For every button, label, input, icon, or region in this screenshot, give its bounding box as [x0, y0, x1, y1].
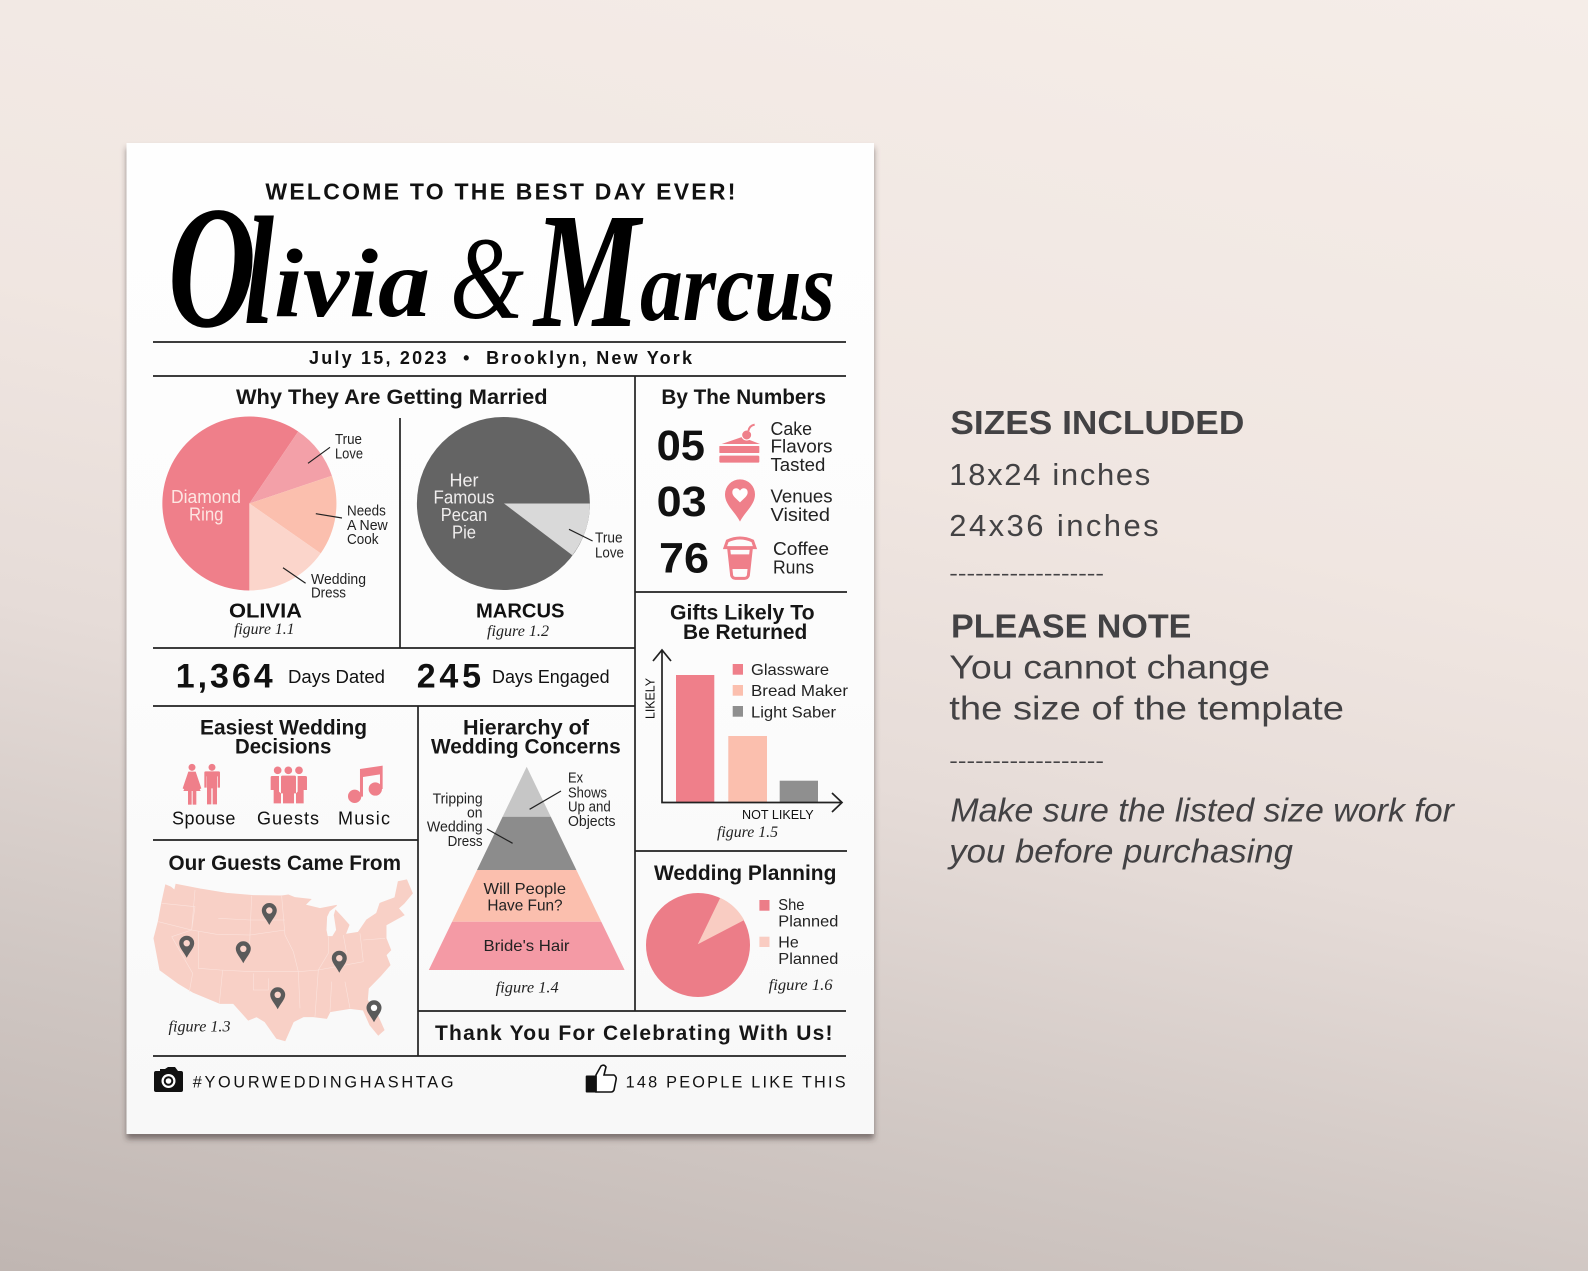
- stat: venues: Venues: [770, 486, 832, 507]
- icon labels: Spouse: [172, 808, 235, 828]
- pie chart: planning split: [646, 893, 750, 997]
- stat: venues: [657, 478, 832, 526]
- legend: Light Saber: [751, 704, 837, 721]
- pie chart: Olivia: Love: [335, 445, 363, 462]
- icon: camera: [154, 1067, 183, 1092]
- legend: Planned: [778, 951, 838, 968]
- stat: cake flavors: Tasted: [770, 454, 825, 475]
- pie chart: Marcus: Pie: [452, 522, 476, 542]
- icon: guests group: [271, 766, 307, 803]
- date and place: July 15, 2023 • Brooklyn, New York: [309, 348, 693, 368]
- panel: gifts likely to be returned: [642, 601, 849, 841]
- heading: Easiest Wedding: [200, 716, 367, 739]
- icon: music note: [348, 766, 383, 803]
- pyramid chart: Ex: [568, 770, 583, 787]
- stat strip: days dated and engaged: Days Engaged: [492, 667, 610, 687]
- pyramid chart: Shows: [568, 784, 607, 801]
- stat: coffee: Runs: [773, 557, 814, 578]
- pyramid chart: on: [467, 805, 482, 822]
- pyramid chart: Wedding: [427, 819, 483, 836]
- pie chart: Olivia: Dress: [311, 584, 346, 601]
- pie chart: Marcus: [417, 417, 624, 590]
- stat: cake flavors: Flavors: [770, 436, 832, 457]
- pyramid chart: Dress: [448, 833, 483, 850]
- pie chart: Marcus: Her: [450, 471, 478, 491]
- caption: figure 1.4: figure 1.4: [496, 980, 559, 997]
- grid rules: [153, 342, 847, 1056]
- stat: venues: 03: [657, 478, 707, 526]
- legend: [759, 897, 838, 968]
- size option: 24x36 inches: [949, 508, 1159, 543]
- side notes: [947, 404, 1456, 869]
- icon: spouse couple: [183, 764, 220, 805]
- pyramid chart: Tripping: [433, 790, 483, 807]
- panel: hierarchy of wedding concerns: [427, 716, 625, 997]
- panel: our guests came from: [154, 852, 412, 1041]
- thank you banner: Thank You For Celebrating With Us!: [435, 1022, 832, 1045]
- couple names script title: O: [168, 170, 256, 364]
- stat strip: days dated and engaged: Days Dated: [288, 667, 385, 687]
- icon labels: Guests: [257, 808, 319, 828]
- heading: Our Guests Came From: [168, 852, 401, 875]
- legend: [733, 662, 849, 721]
- stat: coffee: [659, 534, 829, 582]
- pie chart: Marcus: Famous: [434, 487, 494, 507]
- heading: Why They Are Getting Married: [236, 386, 548, 409]
- pyramid chart: Will People: [484, 881, 566, 898]
- panel: why they are getting married: [162, 386, 624, 640]
- map pins: [179, 903, 382, 1022]
- stat strip: days dated and engaged: [176, 657, 610, 695]
- heading: sizes included: SIZES INCLUDED: [950, 404, 1244, 441]
- stat: cake flavors: [657, 418, 832, 475]
- pie chart: Marcus: Pecan: [441, 505, 487, 525]
- panel: wedding planning: [646, 862, 838, 997]
- legend: He: [778, 934, 799, 951]
- couple names script title: arcus: [640, 231, 835, 342]
- hashtag: #YOURWEDDINGHASHTAG: [193, 1074, 453, 1092]
- legend: Planned: [778, 914, 838, 931]
- like count: 148 PEOPLE LIKE THIS: [626, 1074, 846, 1092]
- pie chart: Olivia: Cook: [347, 531, 379, 548]
- stat strip: days dated and engaged: 245: [417, 657, 481, 695]
- italic note: you before purchasing: [947, 832, 1294, 869]
- icon: thumbs up: [586, 1065, 616, 1092]
- pie chart: Olivia: Needs: [347, 503, 386, 520]
- dashed separator: ------------------: [949, 751, 1104, 773]
- pie chart: Olivia: True: [335, 431, 362, 448]
- label: Olivia: OLIVIA: [229, 599, 302, 622]
- bar chart: [642, 650, 842, 822]
- caption: figure 1.5: figure 1.5: [717, 824, 778, 841]
- pyramid chart: Have Fun?: [487, 898, 563, 915]
- pyramid chart: Up and: [568, 799, 611, 816]
- poster footer: [154, 1065, 846, 1092]
- stat: coffee: Coffee: [773, 538, 829, 559]
- dashed separator: ------------------: [949, 563, 1104, 585]
- couple names script title: ivia: [274, 230, 430, 338]
- heading: Hierarchy of: [463, 716, 590, 739]
- panel: hierarchy of wedding concerns: Wedding Concerns: [431, 735, 621, 758]
- caption: figure 1.1: figure 1.1: [234, 621, 294, 638]
- couple names script title: M: [532, 179, 644, 362]
- note text: the size of the template: [949, 689, 1344, 726]
- bar chart: NOT LIKELY: [742, 807, 814, 822]
- panel: easiest wedding decisions: [172, 716, 390, 828]
- label: Marcus: MARCUS: [476, 599, 564, 622]
- stat: venues: Visited: [770, 504, 830, 525]
- stat: cake flavors: Cake: [770, 418, 812, 439]
- welcome line: WELCOME TO THE BEST DAY EVER!: [265, 178, 735, 204]
- stat: cake flavors: 05: [657, 422, 705, 470]
- heading: By The Numbers: [661, 386, 826, 409]
- pie chart: Olivia: A New: [347, 517, 388, 534]
- stat: coffee: 76: [659, 534, 709, 582]
- pie chart: Olivia: Ring: [189, 505, 224, 525]
- panel: by the numbers: [657, 386, 832, 582]
- pyramid chart: [427, 767, 625, 970]
- couple names script title: &: [450, 213, 524, 344]
- size option: 18x24 inches: [949, 457, 1150, 492]
- pie chart: Olivia: Diamond: [171, 487, 241, 507]
- poster sheet: [126, 143, 874, 1134]
- bar chart: LIKELY: [642, 678, 658, 719]
- italic note: Make sure the listed size work for: [950, 792, 1456, 829]
- caption: figure 1.3: figure 1.3: [168, 1019, 230, 1036]
- legend: She: [778, 897, 805, 914]
- pie chart: Marcus: True: [595, 530, 623, 547]
- panel: easiest wedding decisions: Decisions: [235, 735, 331, 758]
- poster header: [168, 170, 835, 368]
- pie chart: Olivia: [162, 416, 388, 601]
- heading: Gifts Likely To: [670, 601, 815, 624]
- pie chart: Marcus: Love: [595, 544, 624, 561]
- icon labels: [172, 808, 390, 828]
- pyramid chart: Objects: [568, 813, 616, 830]
- heading: please note: PLEASE NOTE: [951, 607, 1191, 644]
- pyramid chart: Bride's Hair: [484, 938, 570, 955]
- icon labels: Music: [338, 808, 390, 828]
- map: United States: [154, 880, 412, 1041]
- stat strip: days dated and engaged: 1,364: [176, 657, 273, 695]
- pie chart: Olivia: Wedding: [311, 571, 366, 588]
- caption: figure 1.2: figure 1.2: [487, 623, 549, 640]
- panel: gifts likely to be returned: Be Returned: [683, 621, 807, 644]
- caption: figure 1.6: figure 1.6: [769, 977, 833, 994]
- couple names script title: l: [244, 185, 274, 357]
- legend: Glassware: [751, 662, 829, 679]
- heading: Wedding Planning: [654, 862, 836, 885]
- legend: Bread Maker: [751, 683, 849, 700]
- note text: You cannot change: [949, 648, 1270, 685]
